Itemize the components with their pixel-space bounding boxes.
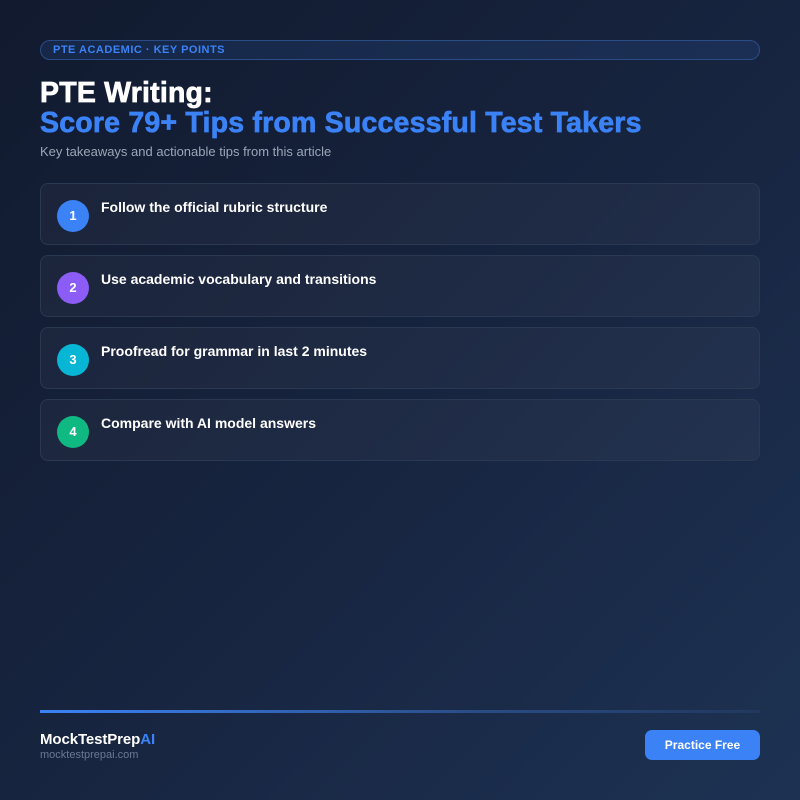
badge 3: 3 bbox=[69, 352, 77, 367]
tag pill: PTE ACADEMIC · KEY POINTS bbox=[53, 44, 225, 56]
text 2: Use academic vocabulary and transitions bbox=[101, 271, 376, 287]
card 1 bbox=[40, 183, 760, 245]
card 4 bbox=[40, 399, 760, 461]
badge 4: 4 bbox=[69, 424, 77, 439]
badge 1 bbox=[57, 200, 89, 232]
badge 4 bbox=[57, 416, 89, 448]
badge 2 bbox=[57, 272, 89, 304]
badge 3 bbox=[57, 344, 89, 376]
text 4: Compare with AI model answers bbox=[101, 415, 316, 431]
card 3 bbox=[40, 327, 760, 389]
url: mocktestprepai.com bbox=[40, 749, 138, 761]
subtitle: Key takeaways and actionable tips from this article bbox=[40, 144, 331, 159]
text 3: Proofread for grammar in last 2 minutes bbox=[101, 343, 367, 359]
badge 1: 1 bbox=[69, 208, 77, 223]
brand: MockTestPrepAI bbox=[40, 731, 155, 748]
footer bar bbox=[40, 710, 760, 713]
title line 2: Score 79+ Tips from Successful Test Takers bbox=[40, 107, 642, 139]
text 1: Follow the official rubric structure bbox=[101, 199, 327, 215]
title line 1: PTE Writing: bbox=[40, 77, 213, 109]
card 2 bbox=[40, 255, 760, 317]
badge 2: 2 bbox=[69, 280, 77, 295]
button: Practice Free bbox=[665, 738, 740, 752]
button bbox=[645, 730, 760, 760]
tag pill bbox=[40, 40, 760, 60]
